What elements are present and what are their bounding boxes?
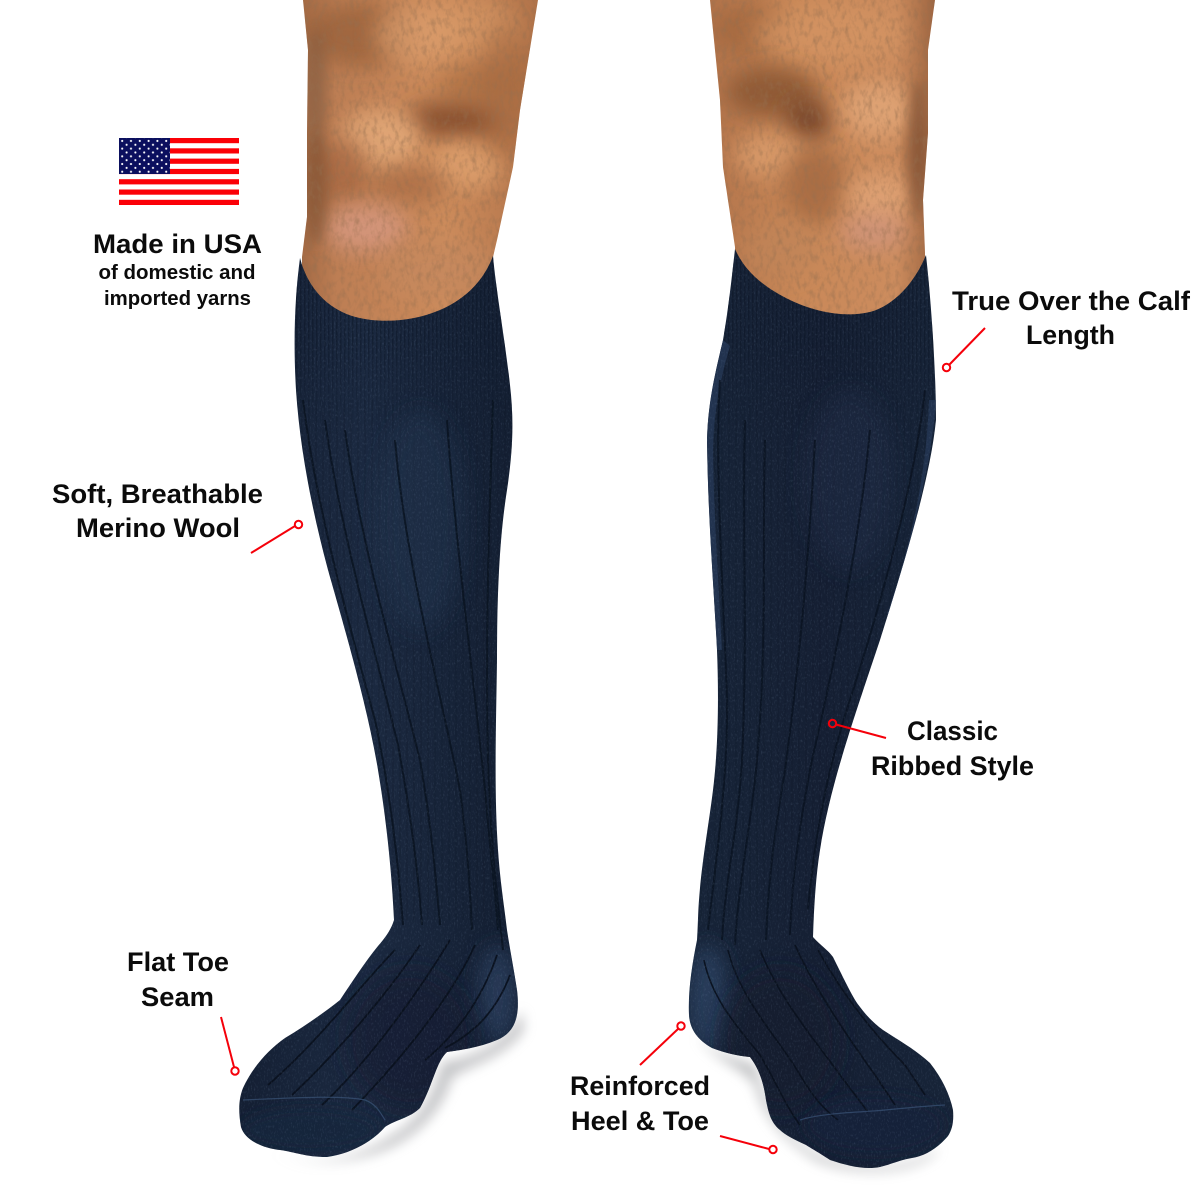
left sock: toe seam	[243, 1097, 385, 1120]
callout: Classic Ribbed Style	[829, 716, 1034, 781]
left leg: knee skin	[302, 0, 538, 321]
text: Made in USA: of domestic and	[98, 262, 256, 284]
right sock: toe seam	[800, 1105, 945, 1120]
right sock: leg ribs	[708, 380, 925, 945]
foot shadows	[262, 1010, 940, 1171]
callout: Classic Ribbed Style: Classic	[907, 716, 998, 746]
icon: American flag	[119, 138, 239, 205]
callout: True Over the Calf Length: True Over the Calf	[952, 286, 1191, 316]
callout: True Over the Calf Length	[943, 286, 1191, 371]
right sock	[680, 245, 960, 1175]
right sock: foot ribs	[704, 945, 925, 1125]
callout: Soft, Breathable Merino Wool	[52, 479, 302, 553]
left sock: cuff ribbing	[296, 256, 510, 406]
left sock: foot ribs	[268, 940, 510, 1110]
callout: Soft, Breathable Merino Wool: Soft, Breathable	[52, 479, 263, 509]
right leg: knee skin	[710, 0, 935, 314]
left sock: leg ribs	[303, 400, 503, 950]
callout: Reinforced Heel & Toe: Reinforced	[570, 1071, 710, 1101]
callout: Reinforced Heel & Toe	[570, 1022, 777, 1153]
callout: Classic Ribbed Style: Ribbed Style	[871, 751, 1034, 781]
callout: Flat Toe Seam: Flat Toe	[127, 947, 229, 977]
callout: Reinforced Heel & Toe: Heel & Toe	[571, 1106, 709, 1136]
callout: Soft, Breathable Merino Wool: Merino Wool	[76, 513, 240, 543]
left sock	[230, 250, 530, 1170]
text: Made in USA: imported yarns	[104, 288, 251, 310]
text: Made in USA	[93, 229, 262, 310]
callout: Flat Toe Seam: Seam	[141, 982, 214, 1012]
callout: Flat Toe Seam	[127, 947, 239, 1075]
text: Made in USA: Made in USA	[93, 229, 262, 259]
right sock: cuff ribbing	[716, 252, 934, 370]
callout: True Over the Calf Length: Length	[1026, 320, 1115, 350]
